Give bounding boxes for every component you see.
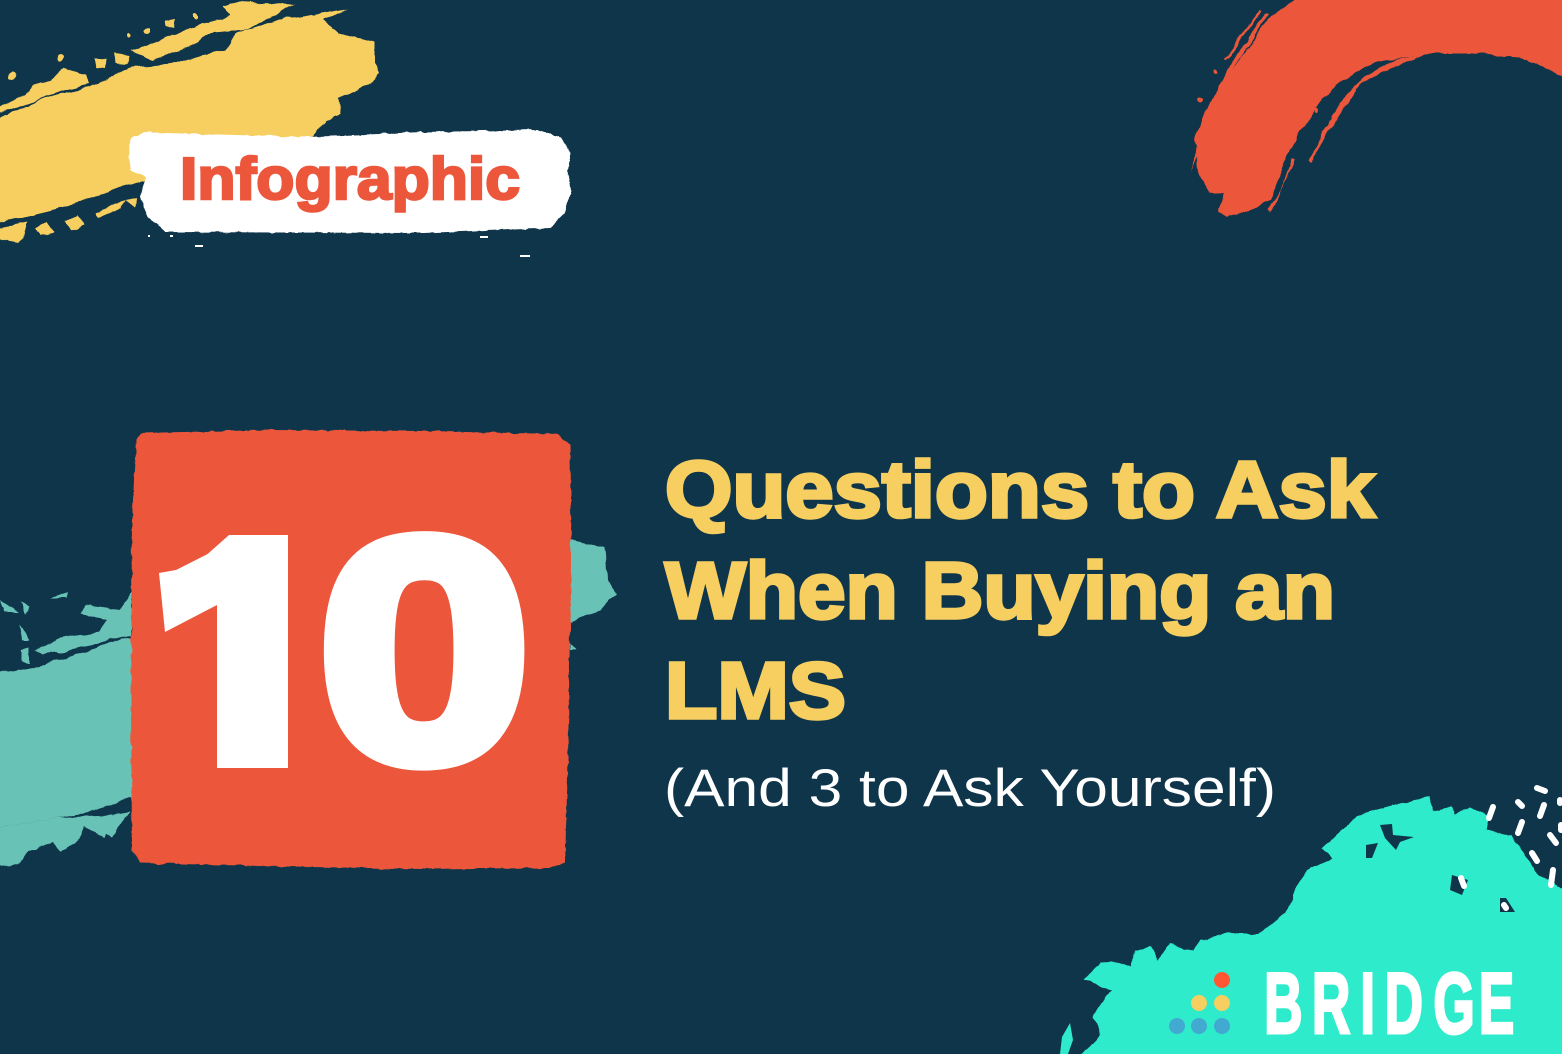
title: Questions to Ask (665, 445, 1376, 534)
teal brush stroke (0, 538, 615, 866)
logo dots (1169, 972, 1230, 1034)
BRIDGE wordmark: BRIDGE (1264, 956, 1514, 1052)
number 1 foot trim (140, 500, 390, 785)
mint brush stroke (1060, 788, 1562, 1054)
white flecks (1461, 788, 1561, 908)
number 10 (140, 469, 531, 838)
title: LMS (665, 646, 846, 735)
white label: Infographic (129, 130, 571, 257)
title (665, 445, 1376, 735)
subtitle: (And 3 to Ask Yourself) (664, 759, 1276, 818)
red arc brush stroke (1192, 0, 1562, 218)
yellow brush stroke (0, 2, 379, 243)
orange number square (131, 430, 571, 869)
label text: Infographic (180, 146, 520, 212)
number 10: 0 (318, 473, 531, 828)
number 1 flag and stem (159, 535, 288, 767)
number 10: 1 (140, 469, 374, 838)
title: When Buying an (665, 546, 1335, 635)
